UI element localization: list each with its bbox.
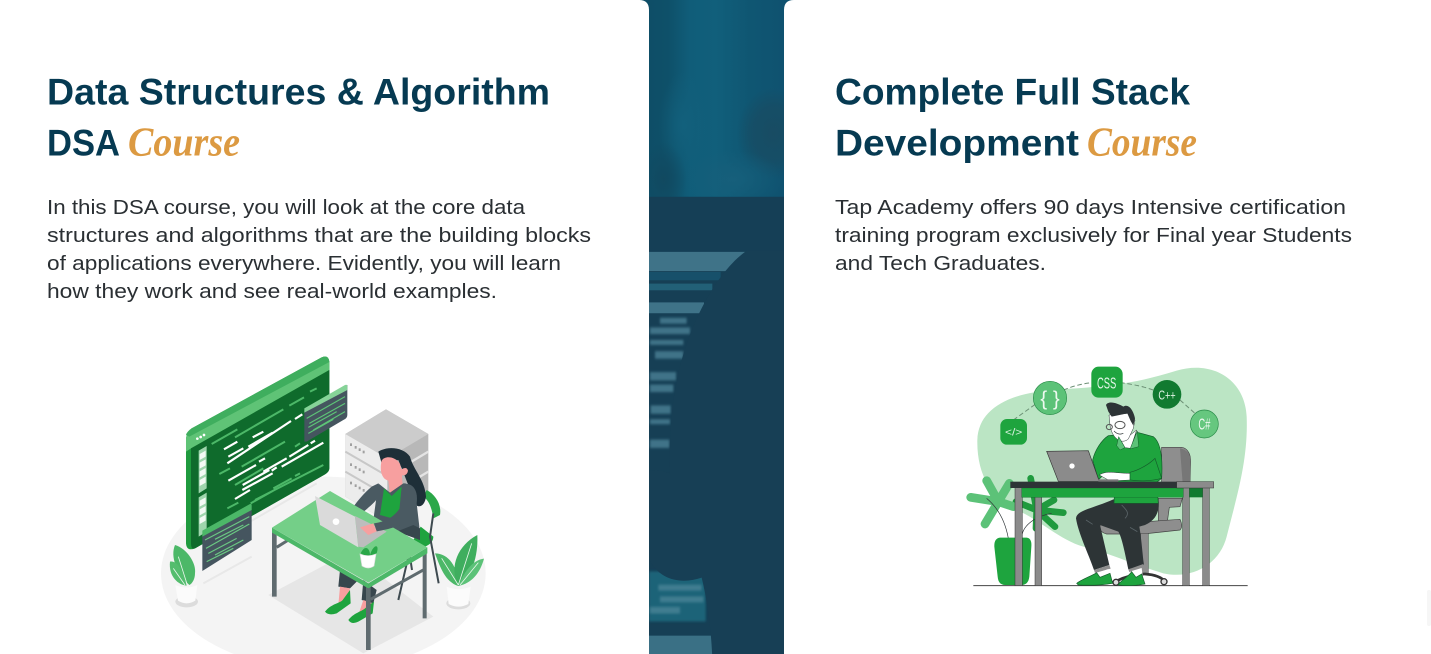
woman body and legs: [325, 448, 426, 623]
chair: [398, 490, 440, 600]
floor line: [973, 584, 1248, 587]
illustration: woman coding at desk: [161, 356, 486, 654]
popup code window top: [304, 385, 347, 442]
man legs: [1076, 499, 1159, 586]
text block: full stack description: Tap Academy offers 90 days Intensive certification: [835, 196, 1346, 219]
heading: full stack course: Course: [1087, 118, 1197, 164]
panel: DSA course card: [0, 0, 649, 654]
text block: full stack description: training program exclusively for Final year Students: [835, 224, 1352, 247]
text block: full stack description: and Tech Graduates.: [835, 252, 1046, 275]
heading: full stack course: [835, 72, 1197, 164]
heading: full stack course: Development: [835, 122, 1079, 164]
heading: DSA course: Data Structures & Algorithm: [47, 72, 550, 112]
text block: DSA description: of applications everywhere. Evidently, you will learn: [47, 252, 561, 275]
heading: DSA course: DSA: [47, 122, 120, 164]
icon: braces: [1033, 381, 1067, 415]
text block: DSA description: structures and algorithms that are the building blocks: [47, 224, 591, 247]
heading: full stack course: Complete Full Stack: [835, 72, 1190, 112]
laptop: [1047, 451, 1118, 482]
desk: [272, 491, 427, 650]
illustration: man coding at desk: [971, 367, 1248, 586]
text block: DSA description: how they work and see real-world examples.: [47, 280, 497, 303]
icon: c#: C#: [1198, 417, 1211, 434]
icon: braces: { }: [1040, 387, 1060, 410]
office chair: [1100, 447, 1191, 585]
potted plant: [971, 478, 1063, 585]
dashed connector: [1013, 383, 1195, 420]
icon: c++: [1153, 380, 1181, 409]
text block: DSA description: In this DSA course, you will look at the core data: [47, 196, 526, 219]
icon: html tag: </>: [1005, 427, 1022, 438]
server rack: [345, 409, 428, 522]
desk: [1010, 482, 1214, 586]
desk plant: [360, 546, 378, 568]
woman arm: [360, 495, 417, 535]
heading: DSA course: [47, 72, 550, 164]
popup code window bottom: [202, 504, 252, 571]
icon: c#: [1190, 410, 1218, 438]
panel: full stack course card: [784, 0, 1431, 654]
left potted plant: [170, 545, 198, 607]
panel: dark photo band: [640, 0, 810, 654]
icon: css: [1091, 367, 1123, 398]
scrollbar shadow hint: [1427, 590, 1431, 626]
icon: html tag: [1000, 419, 1027, 445]
icon: css: CSS: [1097, 375, 1116, 392]
text block: DSA description: [47, 196, 591, 303]
heading: DSA course: Course: [128, 118, 240, 164]
right potted plant: [435, 535, 484, 609]
text block: full stack description: [835, 196, 1352, 275]
background blob: [977, 368, 1247, 575]
man torso: [1093, 402, 1162, 503]
icon: c++: C++: [1158, 388, 1176, 402]
code screen: [186, 356, 329, 549]
laptop: [315, 496, 387, 547]
